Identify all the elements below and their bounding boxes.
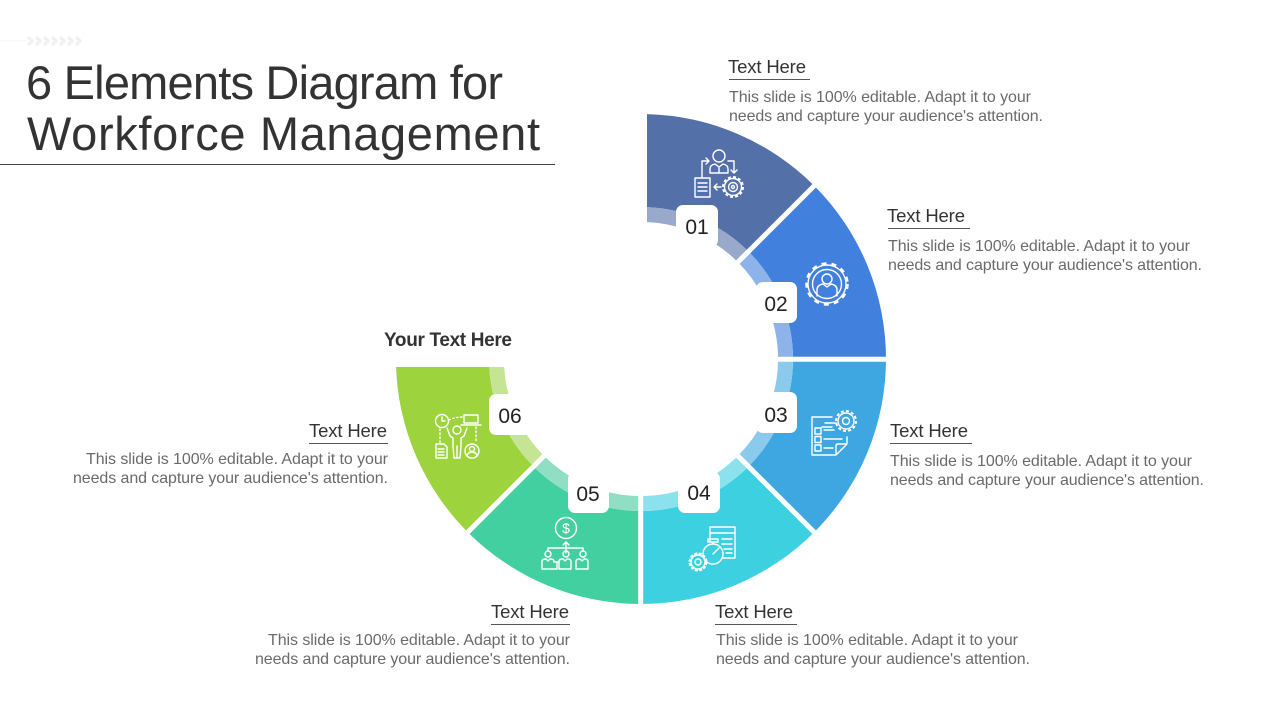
text block 05: needs and capture your audience's attention.: [255, 651, 570, 668]
title: Workforce Management: [27, 107, 540, 160]
badge 05: 05: [576, 483, 600, 506]
badge 03: 03: [764, 404, 788, 427]
title: 6 Elements Diagram for: [26, 56, 503, 109]
text block 01: needs and capture your audience's attention.: [729, 108, 1043, 125]
text block 03: needs and capture your audience's attention.: [890, 472, 1204, 489]
icon: manager workflow: [695, 150, 743, 197]
segment 06: [396, 367, 544, 532]
text block 04: [715, 601, 1030, 668]
icon: payroll hierarchy: $: [562, 520, 570, 536]
title: [0, 56, 555, 164]
badge 02: [756, 282, 797, 323]
badge 04: [678, 472, 720, 513]
donut diagram: [396, 114, 892, 610]
badge 06: [489, 394, 531, 435]
badge 02: 02: [764, 293, 788, 316]
icon: workforce tasks: [436, 414, 481, 458]
text block 01: Text Here: [728, 56, 806, 77]
segment 02: [738, 186, 886, 359]
text block 02: Text Here: [887, 205, 965, 226]
text block 06: Text Here: [309, 420, 387, 441]
badge 06: 06: [498, 405, 522, 428]
text block 06: needs and capture your audience's attention.: [73, 470, 388, 487]
icon: checklist and gear: [812, 411, 856, 455]
segment 04: [641, 456, 814, 604]
text block 02: This slide is 100% editable. Adapt it to your: [888, 238, 1191, 255]
badge 01: 01: [685, 216, 709, 239]
text block 04: needs and capture your audience's attention.: [716, 651, 1030, 668]
text block 05: [255, 601, 571, 668]
segment 01: [647, 114, 814, 262]
text block 04: This slide is 100% editable. Adapt it to your: [716, 632, 1019, 649]
text block 01: This slide is 100% editable. Adapt it to your: [729, 89, 1032, 106]
segment 03: [738, 359, 886, 532]
decorative chevrons: [0, 37, 80, 45]
text block 01: [728, 56, 1043, 125]
center label: Your Text Here: [384, 330, 512, 351]
text block 06: This slide is 100% editable. Adapt it to your: [86, 451, 389, 468]
text block 03: [890, 420, 1204, 489]
segment 05: [468, 456, 641, 604]
badge 05: [568, 472, 609, 513]
text block 06: [73, 420, 389, 487]
badge 04: 04: [687, 482, 711, 505]
text block 05: Text Here: [491, 601, 569, 622]
text block 03: Text Here: [890, 420, 968, 441]
icon: payroll hierarchy: [542, 518, 588, 569]
badge 01: [676, 205, 718, 247]
icon: stopwatch and report: [690, 527, 735, 570]
text block 05: This slide is 100% editable. Adapt it to your: [268, 632, 571, 649]
text block 04: Text Here: [715, 601, 793, 622]
badge 03: [756, 392, 797, 433]
text block 03: This slide is 100% editable. Adapt it to your: [890, 453, 1193, 470]
icon: employee gear: [806, 264, 848, 304]
text block 02: [887, 205, 1202, 274]
text block 02: needs and capture your audience's attention.: [888, 257, 1202, 274]
